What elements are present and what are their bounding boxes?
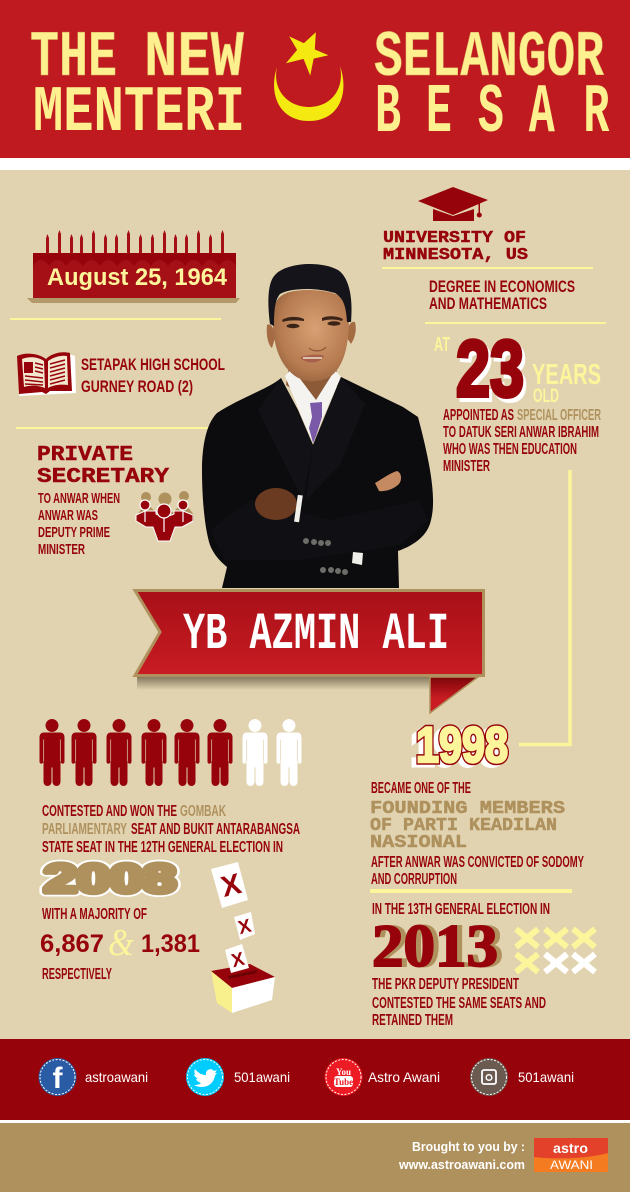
private secretary heading: SECRETARY [37,466,169,489]
text: special officer: APPOINTED AS [443,407,514,424]
credit text: www.astroawani.com [398,1157,525,1172]
logo: astro awani [534,1138,608,1172]
icon: instagram [470,1058,508,1096]
text: degree [429,278,575,313]
text: private secretary: TO ANWAR WHEN [38,490,120,507]
hair [268,264,352,326]
text: founding member: AND CORRUPTION [371,871,457,888]
private secretary heading [37,444,169,489]
text: majority: & [108,922,134,964]
number 23: 23 [456,324,524,413]
icon: twitter [186,1058,224,1096]
credit text: Brought to you by : [412,1139,525,1154]
nose and mouth [309,347,326,351]
logo: astro awani: astro [553,1140,588,1156]
brows and eyes [282,316,343,322]
text: contested and won: SEAT AND BUKIT ANTARABANGSA [131,821,300,838]
icon: book [17,352,76,396]
year 2008: 2008 [44,857,176,901]
text: founding member: FOUNDING MEMBERS [370,799,565,819]
text: contested and won: GOMBAK [180,803,227,820]
icon: facebook: f [52,1062,64,1095]
icon: facebook [38,1058,76,1096]
text: founding member: OF PARTI KEADILAN [370,816,557,836]
name banner [135,590,484,713]
icon: youtube [324,1058,362,1096]
text: majority: 6,867 [40,930,104,958]
text: school [81,356,225,396]
text: founding member [370,780,584,888]
age 23 block: OLD [533,386,559,407]
icon: youtube: You [336,1067,351,1077]
text: private secretary: ANWAR WAS [38,507,98,524]
name: YB AZMIN ALI [183,605,449,664]
icon: ballot box: X [218,868,245,904]
title: left: MENTERI [33,76,245,150]
face [273,290,349,381]
social media footer: astroawani [85,1069,148,1085]
text: school: SETAPAK HIGH SCHOOL [81,356,225,374]
year 1998: 1998 [416,717,508,773]
credit text [398,1139,525,1172]
year 2013: 2013 [372,913,498,979]
text: founding member: NASIONAL [370,833,467,853]
6 of 8 people pictogram [40,719,302,786]
age 23 block: AT [434,334,450,356]
year 2008 [44,857,176,901]
text: contested and won: CONTESTED AND WON THE [42,803,177,820]
social media footer [0,1039,630,1120]
number 23: 23 [459,328,527,417]
text: majority: 1,381 [141,930,200,958]
university name: UNIVERSITY OF [383,229,526,248]
title: left: NEW [144,21,244,95]
text: contested and won [42,803,300,856]
age 23 block: YEARS [532,359,601,391]
year 2008: 2008 [44,857,176,901]
banner tail [430,677,478,713]
text: founding member: BECAME ONE OF THE [371,780,471,797]
credit footer [0,1123,630,1192]
text: school: GURNEY ROAD (2) [81,378,193,396]
date: August 25, 1964 [47,264,228,291]
text: degree: AND MATHEMATICS [429,295,547,313]
shirt [285,368,341,443]
university block: MINNESOTA, US [383,246,528,265]
candles [46,230,224,253]
text: majority [40,906,200,983]
banner body [135,590,484,676]
buttons [303,538,348,575]
title: left: THE [30,21,117,95]
year 1998: 1998 [411,720,503,776]
university block [383,187,528,265]
text: private secretary [38,490,120,558]
text: contested and won: PARLIAMENTARY [42,821,127,838]
icon: ballot box [211,862,275,1013]
icon: graduation cap [418,187,488,221]
text: majority: RESPECTIVELY [42,966,112,983]
icon: crescent and star [274,34,343,121]
text: retained seats [372,976,546,1029]
text: majority: WITH A MAJORITY OF [42,906,147,923]
logo: astro awani: AWANI [550,1160,593,1172]
text: retained seats: THE PKR DEPUTY PRESIDENT [372,976,519,993]
text: private secretary: DEPUTY PRIME [38,524,110,541]
text: special officer [443,407,601,475]
title: right: BESAR [375,75,609,153]
birthday cake [27,230,240,303]
banner shadow [137,677,432,690]
text: contested and won: STATE SEAT IN THE 12TH GENERAL ELECTION IN [42,839,283,856]
text: degree: DEGREE IN ECONOMICS [429,278,575,296]
year 2013: 2013 [377,913,503,979]
icon: ballot box: X [236,916,254,939]
social media footer: 501awani [518,1069,574,1085]
header band [0,0,630,158]
arms and hands [255,488,297,520]
text: retained seats: RETAINED THEM [372,1012,453,1029]
year 1998: 1998 [416,717,508,773]
portrait [202,264,433,588]
ears and neck [267,322,356,348]
title: left [30,21,245,150]
title: right [374,21,609,153]
text: special officer: MINISTER [443,458,490,475]
age 23 block [434,324,601,417]
social media footer: 501awani [234,1069,290,1085]
icon: youtube: Tube [334,1077,353,1087]
social media footer: Astro Awani [368,1069,440,1085]
tie [309,402,322,443]
text: private secretary: MINISTER [38,541,85,558]
icon: people [136,491,194,541]
suit [202,377,433,588]
connector arrow line [519,470,570,744]
icon: ballot box: X [229,949,247,972]
icon: crosses [516,929,595,972]
private secretary heading: PRIVATE [37,444,133,467]
